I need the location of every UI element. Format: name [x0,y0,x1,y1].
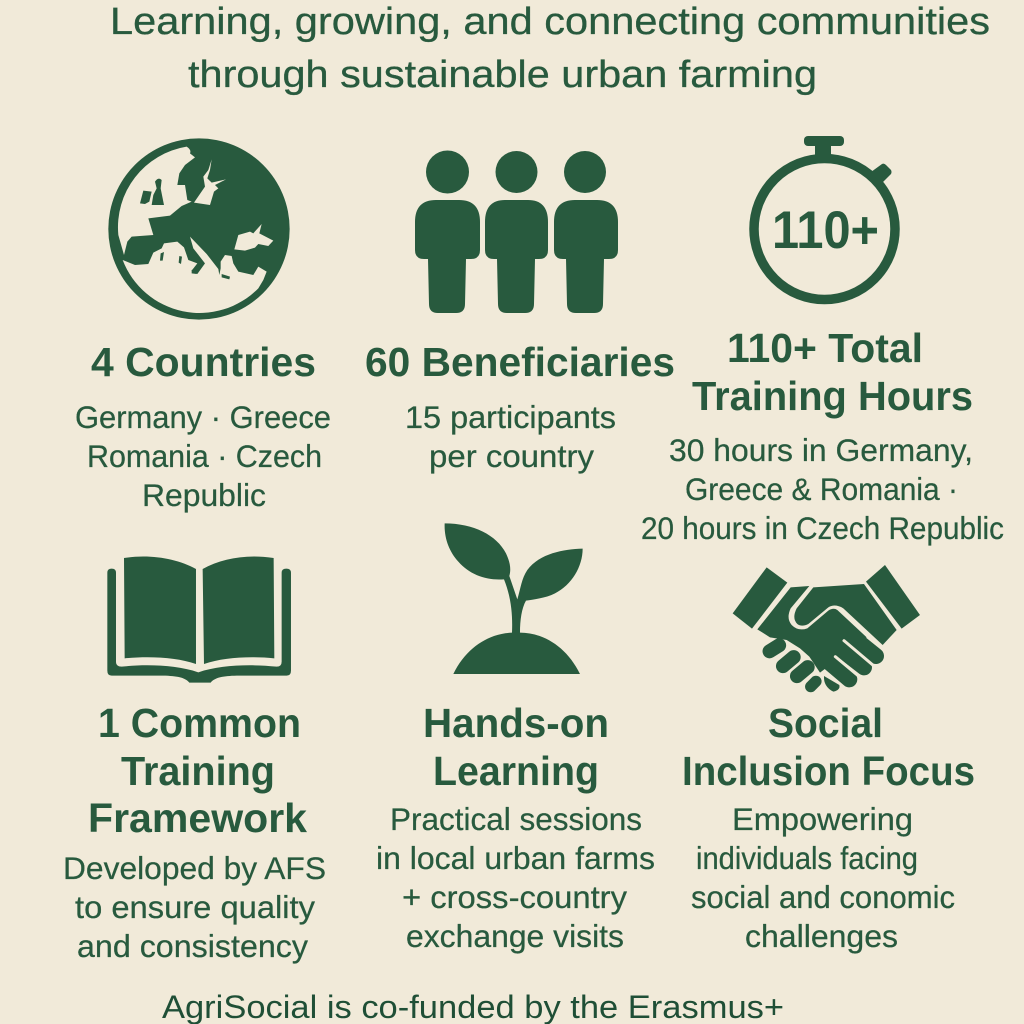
icon: stopwatch: 110+ [772,201,879,260]
text: hands-on description: + cross-country [402,879,627,915]
text: hands-on description [376,801,655,954]
icon: handshake [733,565,920,695]
text: countries list: Romania · Czech [87,438,322,474]
panel: social inclusion focus [682,565,975,954]
text: participants per country [405,399,616,474]
footer: AgriSocial is co-funded by the Erasmus+ [162,989,784,1024]
text: hours per country: 20 hours in Czech Republic [641,510,1004,546]
panel: 60 beneficiaries [365,150,675,474]
icon: open book [107,557,291,683]
text: countries list: Germany · Greece [75,399,331,435]
text: hours per country: Greece & Romania · [685,471,958,507]
text: framework description: Developed by AFS [63,850,326,886]
heading: 4 Countries: 4 Countries [91,339,316,385]
text: hours per country [641,432,1004,546]
text: framework description: and consistency [77,928,308,964]
text: hands-on description: in local urban farms [376,840,655,876]
text: inclusion description [691,801,955,954]
text: participants per country: per country [429,438,594,474]
heading: 60 Beneficiaries: 60 Beneficiaries [365,339,675,385]
text: framework description: to ensure quality [75,889,315,925]
heading: Social Inclusion Focus: Social [768,700,883,746]
text: hands-on description: Practical sessions [390,801,642,837]
title [110,1,990,96]
heading: Hands-on Learning: Hands-on [423,700,609,746]
heading: Social Inclusion Focus [682,700,975,794]
icon: sprout [445,523,583,674]
title: through sustainable urban farming [188,54,817,96]
text: hands-on description: exchange visits [406,918,624,954]
panel: hands-on learning [376,523,655,954]
heading: Social Inclusion Focus: Inclusion Focus [682,748,975,794]
text: participants per country: 15 participants [405,399,616,435]
heading: Hands-on Learning: Learning [433,748,599,794]
heading: Hands-on Learning [423,700,609,794]
heading: 1 Common Training Framework: 1 Common [98,700,301,746]
panel: 4 countries [75,138,331,513]
icon: three people [415,150,618,313]
text: inclusion description: challenges [745,918,898,954]
title: Learning, growing, and connecting communities [110,1,990,43]
text: framework description [63,850,326,964]
panel: 110+ training hours [641,136,1004,546]
text: inclusion description: individuals facing [696,840,918,876]
heading: 1 Common Training Framework: Framework [88,795,307,841]
text: inclusion description: Empowering [732,801,913,837]
icon: globe showing Europe [108,138,290,320]
heading: 110+ Total Training Hours: 110+ Total [727,325,923,371]
text: countries list: Republic [142,477,266,513]
heading: 110+ Total Training Hours [692,325,973,419]
icon: stopwatch [754,136,895,300]
heading: 1 Common Training Framework: Training [121,748,275,794]
text: hours per country: 30 hours in Germany, [669,432,973,468]
text: countries list [75,399,331,513]
heading: 110+ Total Training Hours: Training Hours [692,373,973,419]
heading: 1 Common Training Framework [88,700,307,841]
panel: common training framework [63,557,326,964]
text: inclusion description: social and conomic [691,879,955,915]
